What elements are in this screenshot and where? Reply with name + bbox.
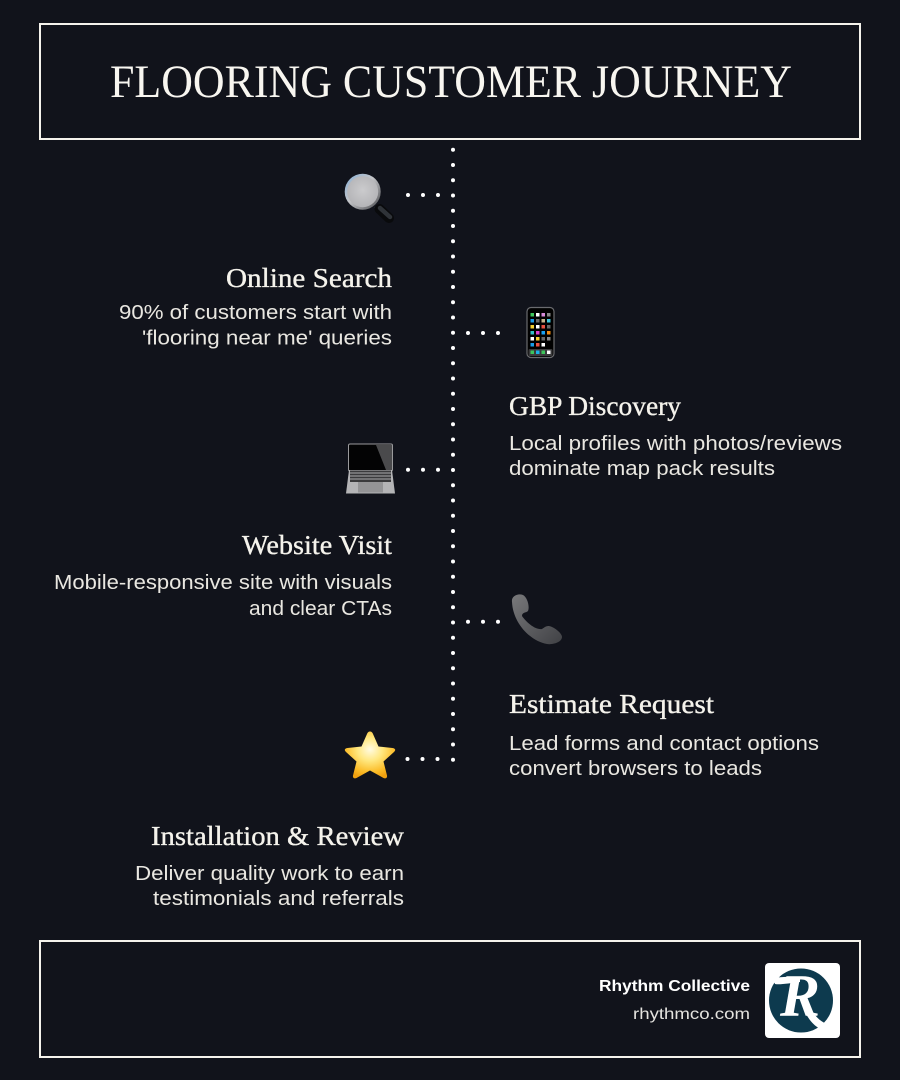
title: FLOORING CUSTOMER JOURNEY — [110, 56, 792, 108]
step: estimate request — [468, 594, 819, 780]
icon: smartphone — [527, 308, 554, 358]
heading: GBP discovery: GBP Discovery — [509, 391, 681, 421]
text: GBP description — [509, 433, 842, 480]
connector: GBP — [468, 331, 500, 335]
icon: magnifying glass — [345, 174, 390, 218]
step: installation and review — [135, 732, 440, 910]
icon: star — [345, 732, 395, 778]
heading: online search: Online Search — [226, 263, 393, 293]
heading: website visit: Website Visit — [242, 530, 393, 560]
text: estimate description: convert browsers to leads — [509, 758, 762, 780]
text: online search description: 'flooring near me' queries — [142, 328, 392, 350]
text: GBP description: dominate map pack results — [509, 458, 775, 480]
title panel — [40, 24, 860, 139]
brand url: rhythmco.com — [633, 1006, 750, 1023]
step: online search — [119, 174, 440, 350]
step: website visit — [54, 444, 440, 620]
text: estimate description: Lead forms and contact options — [509, 733, 819, 755]
connector: estimate — [468, 620, 500, 624]
text: installation description — [135, 863, 404, 910]
text: online search description — [119, 302, 392, 350]
timeline spine — [451, 150, 455, 761]
icon: telephone handset — [512, 594, 562, 644]
text: website description: Mobile-responsive site with visuals — [54, 572, 392, 594]
text: installation description: testimonials and referrals — [153, 888, 404, 910]
connector: website — [408, 468, 440, 472]
logo: R — [779, 963, 820, 1029]
text: website description — [54, 572, 392, 620]
text: GBP description: Local profiles with photos/reviews — [509, 433, 842, 455]
text: installation description: Deliver quality work to earn — [135, 863, 404, 885]
brand name: Rhythm Collective — [599, 978, 750, 995]
logo — [765, 963, 840, 1038]
connector: search — [408, 193, 440, 197]
text: website description: and clear CTAs — [249, 598, 392, 620]
text: online search description: 90% of customers start with — [119, 302, 392, 324]
icon: laptop — [346, 444, 395, 494]
connector: installation — [408, 757, 440, 761]
step: GBP discovery — [468, 308, 842, 480]
heading: installation and review: Installation & Review — [151, 821, 405, 851]
footer panel — [40, 941, 860, 1057]
text: estimate description — [509, 733, 819, 780]
heading: estimate request: Estimate Request — [509, 689, 715, 719]
